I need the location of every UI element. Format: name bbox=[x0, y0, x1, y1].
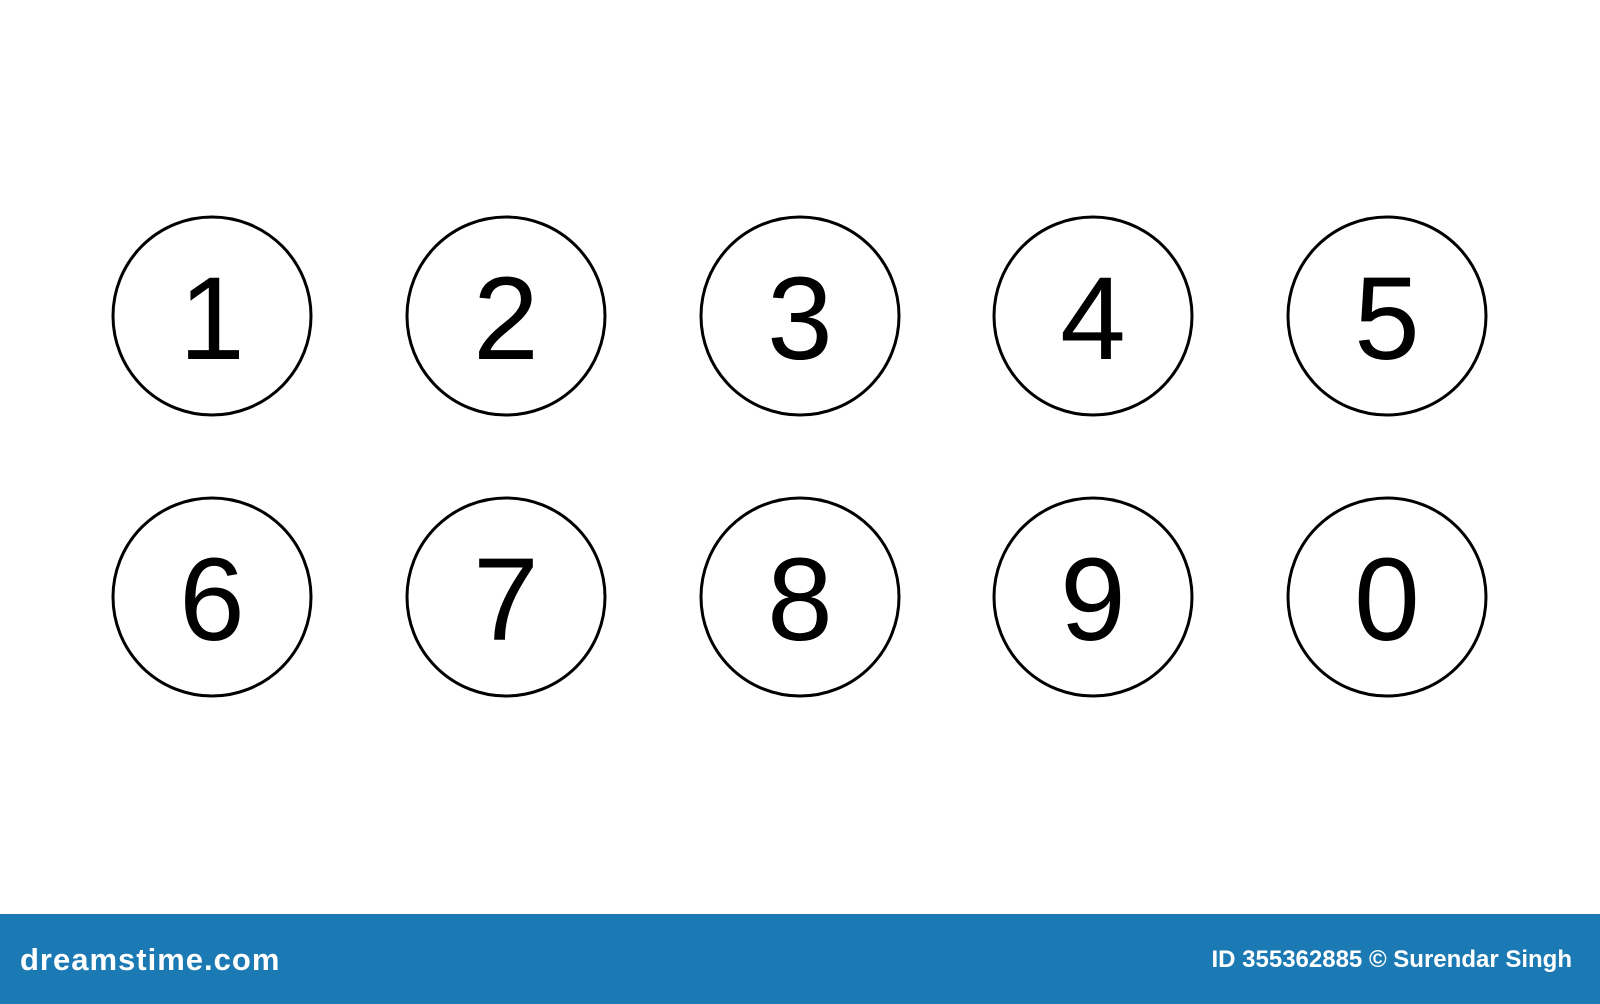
circle 9: 9 bbox=[1060, 534, 1126, 666]
circle 4 bbox=[994, 217, 1192, 415]
circle 3 bbox=[701, 217, 899, 415]
circle 1: 1 bbox=[179, 253, 245, 385]
circle 5 bbox=[1288, 217, 1486, 415]
footer bar bbox=[0, 914, 1600, 1004]
circle 4: 4 bbox=[1060, 253, 1126, 385]
brand text: dreamstime.com bbox=[20, 942, 280, 977]
circle 9 bbox=[994, 498, 1192, 696]
circle 8: 8 bbox=[767, 534, 833, 666]
circle 1 bbox=[113, 217, 311, 415]
circle 0: 0 bbox=[1354, 534, 1420, 666]
circle 8 bbox=[701, 498, 899, 696]
circle 6 bbox=[113, 498, 311, 696]
circle 3: 3 bbox=[767, 253, 833, 385]
circle 6: 6 bbox=[179, 534, 245, 666]
circle 0 bbox=[1288, 498, 1486, 696]
circle 2: 2 bbox=[473, 253, 539, 385]
circle 7 bbox=[407, 498, 605, 696]
circle 5: 5 bbox=[1354, 253, 1420, 385]
circle 2 bbox=[407, 217, 605, 415]
circle 7: 7 bbox=[473, 534, 539, 666]
credit text: ID 355362885 © Surendar Singh bbox=[1211, 946, 1572, 973]
